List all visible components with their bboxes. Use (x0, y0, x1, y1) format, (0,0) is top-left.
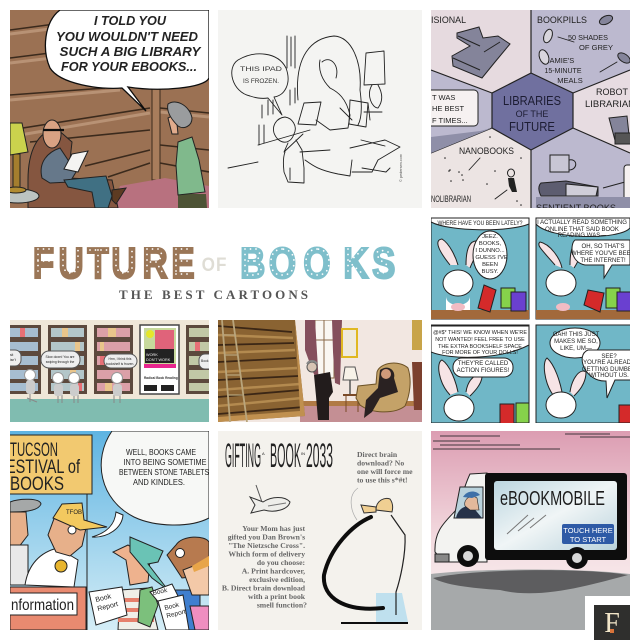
panel: bookshelves and poster cartoon (4, 320, 215, 422)
it was the best of times: T WAS (432, 93, 455, 102)
bookpills (537, 13, 632, 85)
comic frame 2: I ACTUALLY READ SOMETHING (537, 220, 627, 226)
comic frame 3: NOT WANTED! FEEL FREE TO USE (435, 337, 525, 343)
floor lamp (364, 51, 385, 112)
speech bubbles: bookshelf is frozen. (106, 362, 134, 366)
nanobooks: NANOBOOKS (459, 146, 514, 156)
comic frame 2: READING WAS— (558, 233, 606, 239)
speech bubbles (4, 350, 215, 369)
book report notebook: Report (97, 601, 119, 613)
comic frame 1: JEEZ. (482, 234, 498, 240)
speech bubbles: swiping through the (46, 360, 74, 364)
speech bubbles: sit (10, 353, 13, 357)
comic frame 4: LIKE, UM— (560, 346, 592, 352)
logo badge (585, 596, 630, 640)
delivery question: A. Print hardcover, (242, 566, 305, 576)
ladder (222, 320, 247, 422)
comic frame 3: FOR MORE OF YOUR DOLLS! (442, 350, 518, 356)
it was the best of times: HE BEST (432, 104, 465, 113)
subtitle: THE BEST CARTOONS (119, 287, 308, 302)
comic frame 1: I DUNNO... (475, 248, 505, 254)
poster: WORK (146, 353, 158, 357)
leader line (351, 488, 358, 520)
carpet (112, 178, 209, 208)
older volunteer (10, 499, 41, 585)
book reports: Book (164, 601, 181, 612)
robot librarian: ROBOT (596, 87, 628, 97)
comic frame 4 (536, 325, 637, 423)
comic frame 2: THE INTERNET! (580, 258, 626, 264)
stick figures (24, 370, 122, 403)
fireplace (412, 362, 422, 410)
kid with teal cap (113, 537, 168, 630)
robot librarian: LIBRARIAN (585, 99, 635, 109)
book reports (150, 584, 189, 630)
book report notebook (89, 587, 127, 625)
heading: Future of Books: BOOKS (240, 239, 395, 288)
heading: Future of Books (33, 239, 395, 288)
clouds (433, 434, 630, 449)
delivery question: with a print book (248, 592, 306, 601)
bookpills: MEALS (557, 76, 583, 85)
carpet (300, 405, 422, 422)
character's reply: to use this s*#t! (357, 476, 408, 484)
armchair (28, 128, 118, 208)
credit: © pedersen.com (399, 154, 403, 182)
comic title: GIFTING (225, 437, 261, 475)
floor lamp on side table (0, 123, 39, 203)
panel: bunny comic strip (431, 217, 637, 424)
round character (324, 498, 408, 623)
festival sign: TUCSON (10, 440, 58, 461)
floor lamp and side table (343, 367, 360, 412)
nanobooks (431, 136, 522, 206)
standing man (307, 361, 333, 420)
it was the best of times: F TIMES... (432, 116, 468, 125)
comic frame 2: WHERE YOU'VE BEEN (571, 251, 635, 257)
bookpills: 15-MINUTE (544, 66, 582, 75)
bookpills: JAMIE'S (546, 56, 574, 65)
comic frame 3: THEY'RE CALLED (458, 361, 509, 367)
heading: Future of Books: FUTURE (33, 239, 195, 288)
man in TFOB cap (25, 503, 107, 587)
comic frame 2 (536, 218, 635, 319)
panel: Tucson Festival of Books cartoon (6, 431, 209, 630)
delivery question: exclusive edition, (249, 575, 305, 584)
comic frame 3: ACTION FIGURES! (457, 368, 510, 374)
comic frame 3: THE EXTRA BOOKSHELF SPACE (438, 344, 522, 350)
woman in green cardigan (168, 102, 207, 208)
speech bubble: SUCH A BIG LIBRARY (60, 44, 202, 59)
comic frame 4: WITHOUT US. (589, 373, 629, 379)
window and curtains (305, 320, 342, 385)
road (431, 570, 630, 630)
delivery question: Which form of delivery (228, 550, 305, 558)
poster: DON'T WORK (146, 358, 171, 362)
speech bubbles: isn't (10, 358, 16, 362)
comic title: BOOK (270, 437, 301, 475)
bookcases (8, 325, 211, 394)
bookpills: 50 SHADES (568, 33, 608, 42)
book report notebook: Book (95, 593, 112, 604)
character's reply: one will force me (357, 467, 413, 476)
dimensional book: ISIONAL (431, 15, 466, 25)
baseboard (303, 401, 422, 406)
comic frame 4: SEE? (601, 354, 617, 360)
speech bubble (92, 431, 209, 537)
speech bubble (45, 10, 209, 111)
speech bubble: this iPad is frozen: THIS IPAD (240, 67, 283, 73)
speech bubble: this iPad is frozen: IS FROZEN. (243, 79, 279, 85)
panel: gifting a book in 2033 (218, 431, 422, 630)
logo badge: F (604, 608, 620, 639)
missile fish icon (250, 485, 290, 513)
delivery question: Your Mom has just (242, 524, 306, 533)
panel: gifting a book in 2033: 2033 (306, 437, 333, 475)
bookpills: OF GREY (579, 43, 613, 52)
speech bubbles: Slow down! You are (46, 355, 75, 359)
speech bubble: YOU WOULDN'T NEED (56, 29, 199, 44)
poster: Radical Book Reading (144, 376, 178, 380)
touch button: TO START (570, 535, 607, 544)
wooden shelves (218, 320, 305, 422)
comic frame 1: BUSY. (482, 269, 499, 275)
book reports: Report (166, 608, 187, 620)
comic frame 4: GETTING DUMBER (582, 367, 637, 373)
speech bubble: WELL, BOOKS CAME (126, 448, 196, 457)
bookpills: BOOKPILLS (537, 15, 587, 25)
speech bubble: this iPad is frozen (232, 54, 288, 115)
panel: big library cartoon (0, 10, 209, 208)
delivery question: gifted you Dan Brown's (228, 532, 305, 542)
nanobooks: NOLIBRARIAN (431, 194, 471, 204)
speech bubble: I TOLD YOU (94, 13, 167, 28)
central hexagon title: LIBRARIES (503, 94, 561, 108)
comic frame 1: WHERE HAVE YOU BEEN LATELY? (438, 220, 523, 227)
heading: Future of Books: OF (202, 254, 226, 275)
comic frame 4: GAH! THIS JUST (553, 332, 600, 338)
driver (456, 491, 482, 518)
delivery question: B. Direct brain download (222, 584, 306, 592)
yellow picture (342, 320, 422, 357)
info booth (8, 587, 86, 630)
central hexagon title: FUTURE (509, 119, 555, 134)
info booth: nformation (11, 597, 74, 614)
comic frame 3: @#$* THIS! WE KNOW WHEN WE'RE (433, 330, 527, 336)
kids on the right (167, 537, 209, 630)
central hexagon title (492, 73, 573, 150)
comic frame 1: BEEN (482, 262, 498, 268)
title block (33, 239, 395, 302)
panel: frozen iPad cartoon (218, 10, 422, 208)
comic frame 1: BOOKS, (479, 241, 502, 247)
delivery question: "The Nietzsche Cross". (228, 541, 305, 550)
character's reply: Direct brain (357, 450, 398, 459)
speech bubbles: Book (201, 359, 209, 363)
poster (140, 325, 179, 394)
boy holding up tablet (273, 102, 321, 183)
delivery question: smell function? (257, 600, 307, 610)
festival sign: ESTIVAL of (6, 457, 81, 478)
comic frame 1 (431, 218, 529, 319)
comic title: A (262, 451, 265, 456)
armchair and reading man (297, 36, 400, 176)
sentient books: SENTIENT BOOKS (536, 203, 616, 214)
comic frame 4: MAKES ME SO, (554, 339, 598, 345)
comic frame 1: I GUESS I'VE (472, 255, 508, 261)
robot librarian (585, 87, 635, 144)
comic frame 3 (431, 325, 529, 424)
touch button: TOUCH HERE (563, 526, 613, 535)
man in TFOB cap: TFOB (66, 510, 82, 516)
armchair with seated man (356, 363, 410, 418)
man reading tablet (41, 120, 126, 208)
it was the best of times (425, 90, 492, 153)
speech bubble: FOR YOUR EBOOKS... (61, 59, 197, 74)
bookshelf behind (228, 36, 330, 168)
central hexagon title: OF THE (516, 109, 548, 119)
panel: libraries of the future (425, 10, 636, 214)
delivery question: do you choose: (257, 558, 305, 567)
panel: watercolor library cartoon (218, 320, 422, 422)
festival sign: BOOKS (10, 474, 64, 495)
comic frame 2: ONLINE THAT SAID BOOK (545, 227, 619, 233)
truck (435, 473, 627, 569)
comic frame 4: YOU'RE ALREADY (583, 360, 635, 366)
book reports: Book (152, 587, 169, 597)
comic frame 2: OH, SO THAT'S (582, 244, 624, 250)
wheels (457, 545, 588, 569)
touch button (562, 524, 614, 544)
speech bubble: AND KINDLES. (133, 478, 185, 487)
sentient books (536, 155, 636, 214)
panel: eBookmobile cartoon (431, 431, 630, 630)
festival sign (6, 435, 92, 630)
dimensional book (431, 15, 510, 78)
speech bubbles: Hrm, I think this (109, 357, 132, 361)
comic title: IN (301, 451, 305, 456)
character's reply: download? No (357, 458, 404, 468)
